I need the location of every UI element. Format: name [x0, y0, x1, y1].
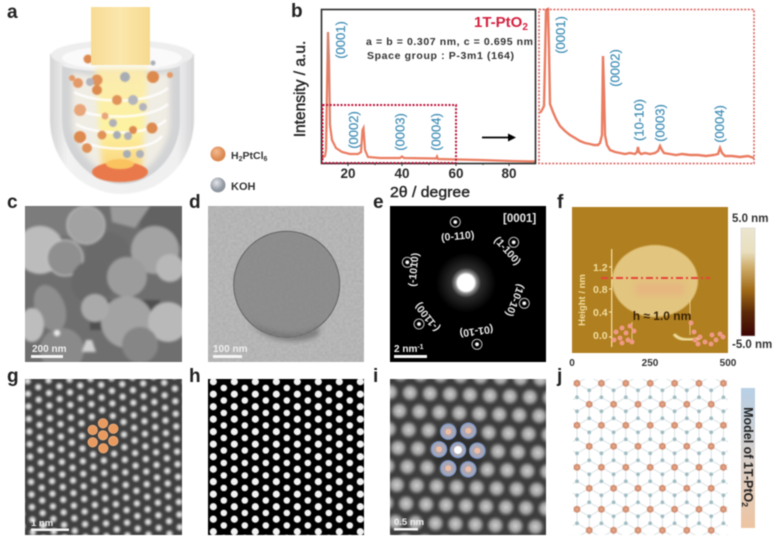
- legend: KOH: [210, 178, 256, 193]
- panel d: TEM image: [189, 192, 364, 362]
- crucible: [50, 40, 194, 194]
- panel j: structure model: [556, 366, 755, 535]
- SEM scale bar: 200 nm: [32, 344, 67, 355]
- material name: 1T-PtO: [474, 14, 522, 31]
- scale bar: 0.5 nm: [394, 517, 424, 528]
- peak labels zoom: (0001): [553, 16, 568, 54]
- legend: H2PtCl6: PtCl: [242, 150, 264, 162]
- scale bar: 1 nm: [31, 518, 53, 529]
- zoom region box: [322, 105, 456, 163]
- x axis labels: 500: [720, 358, 737, 369]
- swirl and particles: [69, 54, 173, 182]
- x axis labels: 0: [569, 358, 575, 369]
- peak labels main: (0002): [346, 111, 361, 149]
- zoomed chart frame: [539, 10, 754, 164]
- label j: j: [556, 366, 562, 387]
- label f: f: [557, 192, 564, 213]
- peak labels main: (0004): [428, 113, 444, 151]
- spot indices: [406, 229, 527, 339]
- label h: h: [189, 366, 201, 387]
- label b: b: [291, 1, 303, 22]
- atomic image: [24, 378, 183, 536]
- x axis labels: 60: [448, 166, 464, 181]
- space group: Space group : P-3m1 (164): [367, 50, 514, 62]
- spot indices: (-1010): [406, 252, 422, 287]
- zone axis: [0001]: [503, 213, 536, 225]
- x axis labels: [340, 166, 517, 181]
- colorbar labels: [732, 213, 772, 351]
- peak labels zoom: (10-10): [632, 99, 646, 141]
- colorbar labels: 5.0 nm: [732, 213, 768, 225]
- scale bar: [394, 344, 427, 358]
- spot indices: (10-10): [503, 282, 527, 318]
- x axis labels: 250: [642, 358, 659, 369]
- panel i: magnified image: [373, 366, 556, 541]
- TEM disc image: [208, 206, 364, 362]
- TEM scale bar: 100 nm: [213, 344, 248, 355]
- panel f: AFM image: [557, 192, 772, 369]
- main chart frame: [322, 10, 536, 164]
- AFM map: [572, 207, 728, 353]
- dark halo: [431, 426, 485, 474]
- SEM discs: [24, 205, 183, 363]
- model title: Model of 1T-PtO: [741, 407, 755, 502]
- main XRD curve: [322, 32, 535, 162]
- diffraction background: [390, 206, 546, 362]
- scale bar: 2 nm: [394, 344, 417, 355]
- label i: i: [373, 366, 378, 387]
- height tick labels: 0.8: [593, 284, 608, 296]
- label e: e: [373, 192, 384, 213]
- panel a: crucible schematic: [7, 2, 268, 194]
- peak labels zoom: (0002): [608, 49, 622, 87]
- step height annotation: h ≈ 1.0 nm: [633, 309, 691, 323]
- legend: H2PtCl6: 6: [264, 156, 268, 163]
- x axis labels: [569, 358, 737, 369]
- yellow rod: [91, 7, 150, 65]
- legend: H2PtCl6: [210, 146, 268, 163]
- y axis title: Intensity / a.u.: [292, 41, 309, 137]
- material name: 2: [522, 22, 528, 33]
- spot indices: (1-100): [491, 234, 523, 268]
- zoomed XRD curve: [540, 9, 754, 158]
- colorbar labels: -5.0 nm: [732, 339, 772, 351]
- orange atoms: [88, 418, 118, 453]
- height tick labels: 0.4: [593, 307, 608, 319]
- x axis labels: 80: [501, 166, 517, 181]
- legend: H2PtCl6: 2: [239, 156, 243, 163]
- height tick labels: 1.2: [593, 262, 608, 274]
- peak labels main: (0003): [392, 113, 408, 151]
- highlighted atoms: [432, 423, 485, 477]
- peak labels zoom: (0003): [652, 104, 668, 142]
- label d: d: [189, 192, 201, 213]
- atomic image: [389, 378, 547, 536]
- height profile axis: [609, 249, 612, 347]
- panel h: simulated lattice: [189, 366, 364, 535]
- peak labels main: [333, 21, 444, 151]
- spot indices: (-1100): [413, 300, 443, 334]
- label a: a: [7, 2, 18, 23]
- atomic lattice model: [573, 379, 728, 535]
- scan line: [601, 277, 710, 279]
- panel c: SEM image: [7, 196, 183, 363]
- panel b: XRD charts: [291, 1, 754, 201]
- simulated image: [208, 379, 364, 535]
- model strip: [741, 388, 755, 528]
- colorbar: [741, 228, 755, 336]
- height axis title: Height / nm: [577, 274, 588, 326]
- profile points: [612, 282, 726, 346]
- legend: H2PtCl6: H: [231, 150, 239, 162]
- arrow: [482, 134, 516, 142]
- panel g: HAADF image: [7, 370, 183, 536]
- x axis labels: 20: [340, 166, 356, 181]
- label c: c: [7, 192, 18, 213]
- x axis title: 2θ / degree: [390, 184, 470, 201]
- lattice parameters: a = b = 0.307 nm, c = 0.695 nm: [366, 36, 533, 48]
- model title: 2: [740, 502, 750, 507]
- x axis labels: 40: [394, 166, 410, 181]
- peak labels zoom: [553, 16, 727, 143]
- spot indices: (01-10): [459, 323, 494, 339]
- height tick labels: 0.0: [593, 330, 608, 342]
- central beam: [436, 253, 496, 313]
- peak labels main: (0001): [333, 21, 348, 59]
- spot indices: (0-110): [441, 229, 475, 244]
- peak labels zoom: (0004): [712, 105, 727, 143]
- label g: g: [7, 366, 19, 387]
- diffraction spots: [402, 217, 529, 349]
- x axis ticks: [348, 163, 509, 166]
- legend: KOH: KOH: [231, 181, 256, 193]
- scale bar: -1: [417, 344, 424, 351]
- height tick labels: [593, 262, 608, 342]
- scale bar: [31, 518, 69, 531]
- panel e: diffraction pattern: [373, 192, 546, 362]
